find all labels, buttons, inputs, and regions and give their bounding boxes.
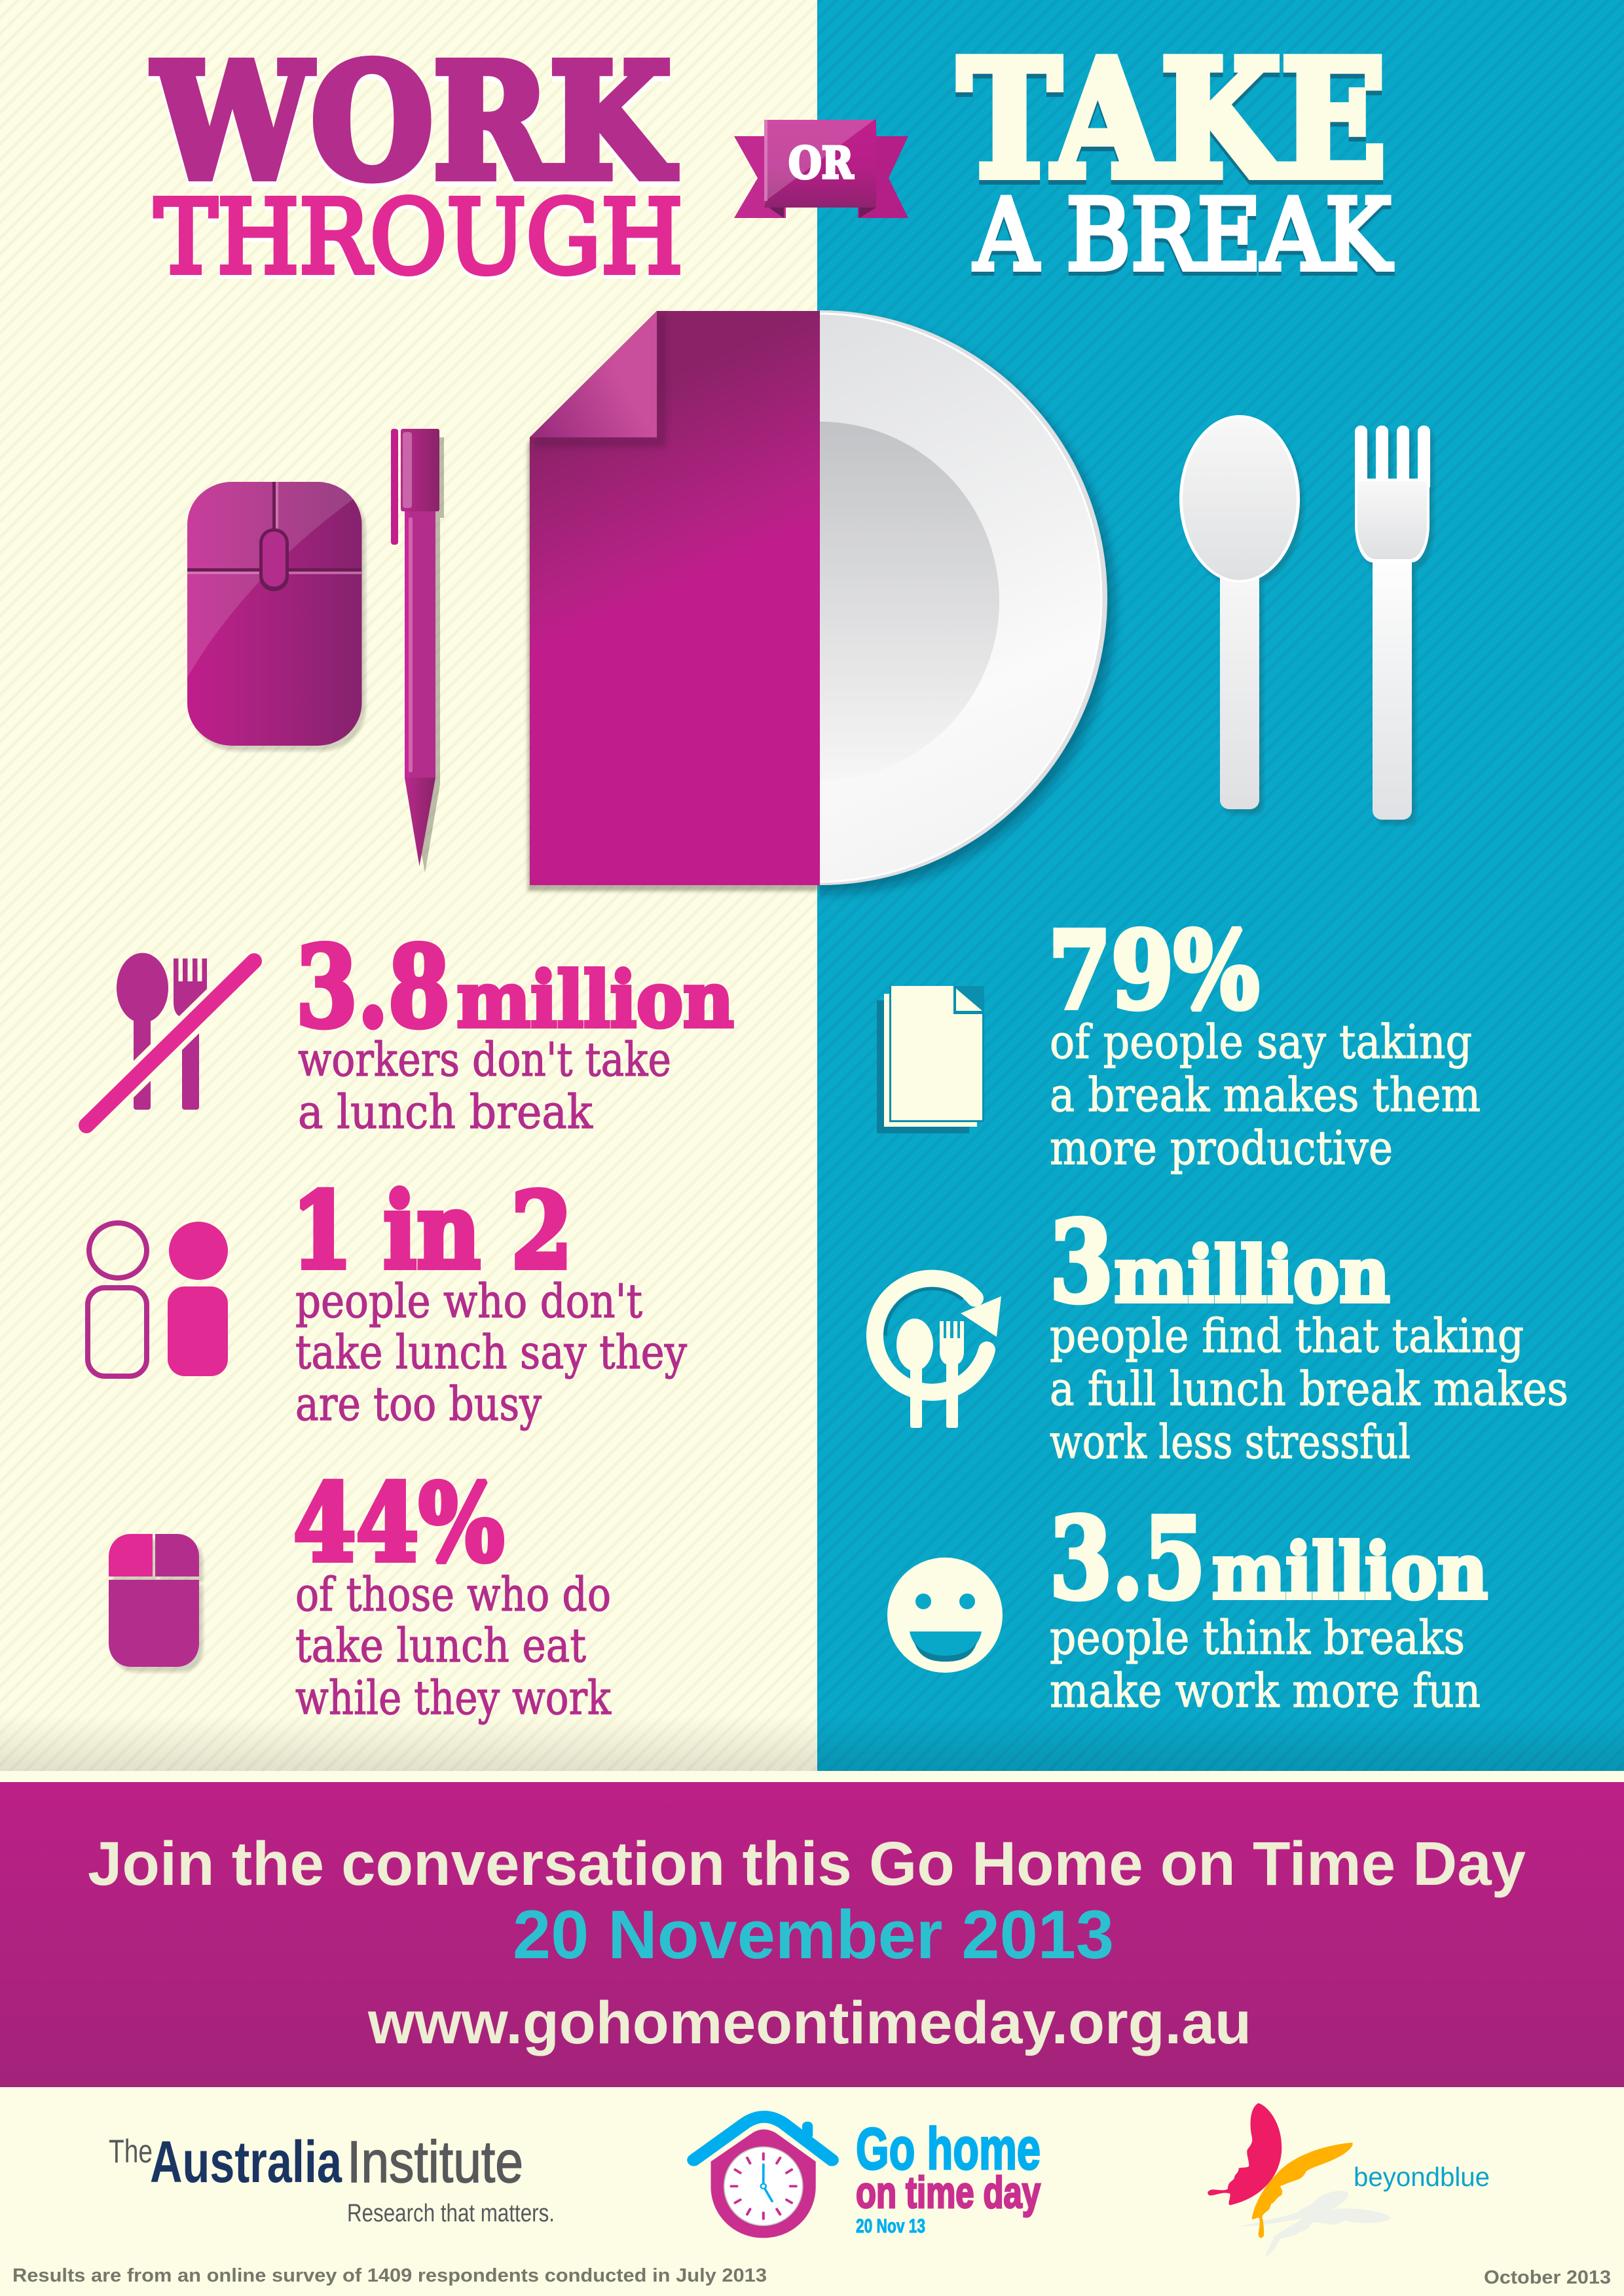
stat: 44%: 44% bbox=[293, 1461, 504, 1586]
logo: go home on time day: Go home bbox=[856, 2117, 1041, 2182]
stat: 79%: more productive bbox=[1050, 1121, 1393, 1175]
stat: 1 in 2: people who don't bbox=[295, 1274, 642, 1328]
stat: 3.8 million bbox=[296, 922, 733, 1139]
stat: 79% bbox=[1048, 909, 1481, 1175]
stat: 3.5 million: make work more fun bbox=[1050, 1664, 1481, 1718]
heading: work through: THROUGH bbox=[155, 178, 683, 297]
logo: go home on time day: 20 Nov 13 bbox=[856, 2215, 925, 2237]
logo: the australia institute bbox=[109, 2130, 555, 2227]
panel: work through background bbox=[0, 0, 817, 1771]
stat: 3.8 million: million bbox=[457, 955, 733, 1045]
icon: small mouse bbox=[109, 1534, 199, 1667]
stat: 1 in 2: 1 in 2 bbox=[291, 1169, 572, 1292]
stat: 3 million: million bbox=[1115, 1230, 1390, 1320]
stat: 3 million: a full lunch break makes bbox=[1050, 1362, 1568, 1416]
heading: work through: THROUGH bbox=[155, 182, 683, 301]
heading: take a break: TAKE bbox=[958, 29, 1386, 218]
icon: lunch cycle bbox=[875, 1279, 1001, 1428]
logo: go home on time day: on time day bbox=[856, 2168, 1041, 2217]
illustration: plate bbox=[820, 310, 1120, 899]
stat: 3.8 million: 3.8 bbox=[296, 922, 450, 1053]
stat: 1 in 2 bbox=[291, 1169, 687, 1431]
stat: 3.5 million: 3.5 bbox=[1050, 1493, 1206, 1624]
icon: two people bbox=[88, 1222, 228, 1376]
stat: 3 million: work less stressful bbox=[1050, 1415, 1411, 1469]
heading: work through bbox=[152, 29, 683, 301]
stat: 44%: while they work bbox=[295, 1671, 612, 1725]
icon: large fork bbox=[1355, 426, 1430, 820]
clock house icon bbox=[694, 2117, 832, 2238]
heading: take a break: TAKE bbox=[958, 25, 1386, 213]
logo: the australia institute: Australia bbox=[150, 2130, 342, 2195]
butterfly icon bbox=[1208, 2103, 1391, 2257]
icon: pen bbox=[391, 429, 444, 873]
icon: documents bbox=[877, 986, 984, 1133]
stat: 3 million: people find that taking bbox=[1050, 1309, 1524, 1363]
stat: 44%: take lunch eat bbox=[295, 1618, 586, 1673]
logo: beyondblue bbox=[1208, 2103, 1490, 2257]
illustration: paper sheet bbox=[530, 311, 820, 885]
ribbon: or: OR bbox=[788, 137, 854, 189]
logo: beyondblue: beyondblue bbox=[1354, 2162, 1490, 2192]
stat: 3.5 million: people think breaks bbox=[1050, 1611, 1465, 1665]
stat: 3.8 million: workers don't take bbox=[298, 1032, 671, 1087]
stat: 79%: of people say taking bbox=[1050, 1015, 1472, 1069]
stat: 3.8 million: a lunch break bbox=[298, 1085, 593, 1139]
stat: 3 million bbox=[1050, 1197, 1568, 1469]
icon: large spoon bbox=[1179, 415, 1300, 809]
panel: call to action banner: www.gohomeontimeday.org.au bbox=[367, 1990, 1251, 2056]
icon: computer mouse bbox=[187, 482, 361, 746]
logo: go home on time day bbox=[694, 2117, 1041, 2238]
logo: the australia institute: The bbox=[109, 2133, 153, 2170]
panel: take a break background bbox=[817, 0, 1624, 1771]
panel: call to action banner bbox=[0, 1782, 1624, 2087]
stat: 44% bbox=[293, 1461, 612, 1725]
heading: take a break bbox=[958, 25, 1393, 297]
stat: 3.5 million bbox=[1050, 1493, 1488, 1718]
stat: 1 in 2: take lunch say they bbox=[295, 1325, 687, 1379]
stat: 79%: 79% bbox=[1048, 909, 1259, 1033]
icon: smiley bbox=[887, 1558, 1003, 1673]
heading: work through: WORK bbox=[152, 35, 676, 219]
stat: 3 million: 3 bbox=[1050, 1197, 1113, 1328]
stat: 79%: a break makes them bbox=[1050, 1068, 1481, 1122]
stat: 3.5 million: million bbox=[1212, 1526, 1488, 1616]
stat: 1 in 2: are too busy bbox=[295, 1377, 542, 1431]
footnote: date: October 2013 bbox=[1484, 2267, 1611, 2288]
heading: take a break: A BREAK bbox=[974, 183, 1393, 297]
panel: call to action banner: Join the conversation this Go Home on Time Day bbox=[88, 1829, 1526, 1899]
heading: work through: WORK bbox=[152, 29, 676, 214]
paper fold bbox=[530, 311, 657, 437]
heading: take a break: A BREAK bbox=[974, 179, 1393, 293]
logo: the australia institute: Research that matters. bbox=[347, 2200, 555, 2227]
panel: call to action banner: 20 November 2013 bbox=[513, 1897, 1114, 1973]
icon: no lunch (crossed cutlery) bbox=[86, 953, 254, 1125]
stat: 44%: of those who do bbox=[295, 1567, 611, 1622]
footnote: survey source: Results are from an online survey of 1409 respondents conducted in July 2013 bbox=[12, 2265, 767, 2286]
ribbon: or bbox=[734, 120, 908, 218]
logo: the australia institute: Institute bbox=[347, 2130, 523, 2195]
